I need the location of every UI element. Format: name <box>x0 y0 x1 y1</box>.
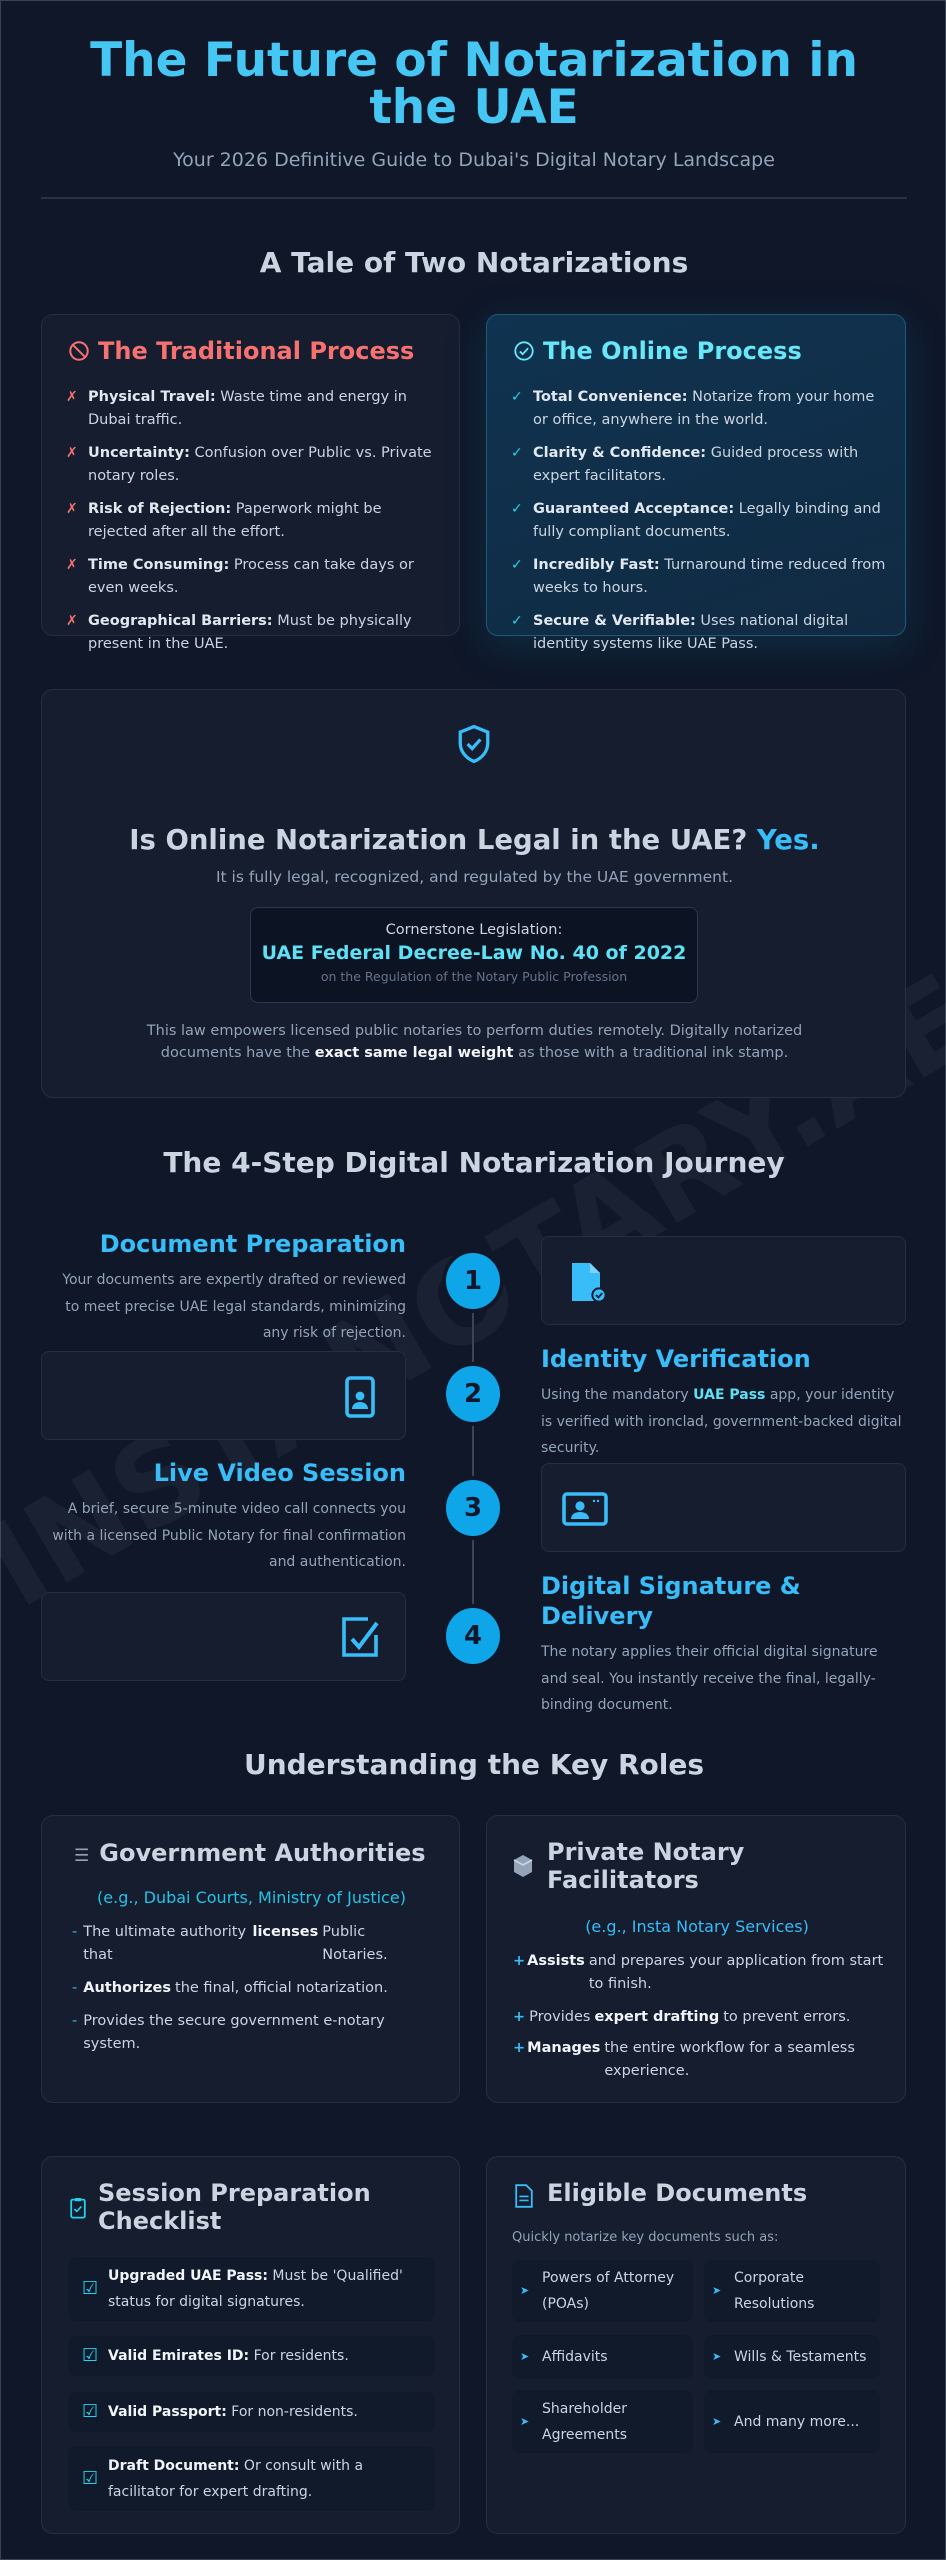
step 3 text <box>52 1459 406 1570</box>
panel: eligible documents: ➤ <box>712 2350 721 2363</box>
list: benefits: ✓ <box>511 501 523 517</box>
heading: traditional: The Traditional Process <box>98 337 414 365</box>
panel: eligible documents: ➤ <box>712 2284 721 2297</box>
list: benefits <box>511 389 885 652</box>
callout: legislation <box>250 907 698 1003</box>
list: benefits: Clarity & Confidence: Guided process with expert facilitators. <box>533 445 858 484</box>
step 4 text: Digital Signature & <box>541 1572 801 1600</box>
list: gov duties: Authorizes <box>83 1980 171 1996</box>
list: drawbacks: Time Consuming: Process can take days or even weeks. <box>88 557 414 596</box>
step 1 text: to meet precise UAE legal standards, minimizing any risk of rejection. <box>65 1298 406 1341</box>
step 4 circle <box>446 1608 500 1664</box>
heading: legal: Is Online Notarization Legal in the UAE? Yes. <box>129 824 820 856</box>
panel: eligible documents: Wills & Testaments <box>734 2349 866 2365</box>
title: The Future of Notarization in <box>90 33 858 88</box>
step 3 icon box <box>541 1463 906 1552</box>
title <box>90 33 858 135</box>
text: gov examples: (e.g., Dubai Courts, Ministry of Justice) <box>97 1888 406 1907</box>
heading: private: Facilitators <box>547 1866 699 1894</box>
list: drawbacks: Uncertainty: Confusion over Public vs. Private notary roles. <box>88 445 432 484</box>
list: private duties <box>513 1953 883 2079</box>
heading: journey: The 4-Step Digital Notarization Journey <box>163 1146 785 1179</box>
panel: eligible documents: ➤ <box>712 2414 721 2428</box>
list: drawbacks: ✗ <box>66 613 78 629</box>
list: private duties: Provides <box>529 2009 590 2025</box>
callout: legislation: Cornerstone Legislation: <box>386 922 562 938</box>
list: private duties: and prepares your application from start to finish. <box>589 1953 883 1992</box>
list: gov duties: licenses <box>252 1924 318 1940</box>
icon: cube <box>514 1855 532 1877</box>
grid: documents <box>512 2260 693 2322</box>
step 3 circle <box>446 1480 500 1536</box>
step 4 text: The notary applies their official digital signature and seal. You instantly receive the final, legally-binding document. <box>541 1644 878 1713</box>
heading: government: ☰ Government Authorities <box>74 1839 426 1867</box>
panel: traditional process <box>41 314 460 636</box>
step 2 text <box>541 1345 901 1456</box>
grid: documents: Powers of Attorney (POAs) <box>542 2270 674 2312</box>
step 1 icon box <box>541 1236 906 1325</box>
list: private duties: Assists <box>527 1953 585 1969</box>
heading: private <box>547 1838 744 1894</box>
list: private duties: + <box>513 2040 525 2056</box>
icon: video <box>562 1492 608 1526</box>
step 1 text <box>62 1230 406 1341</box>
item: uae pass: ☑ <box>82 2278 98 2299</box>
item: emirates id: ☑ <box>82 2345 98 2366</box>
list: benefits: ✓ <box>511 445 523 461</box>
step 3 circle: 3 <box>464 1493 482 1523</box>
list: gov duties: - <box>72 1980 77 1996</box>
item: draft: ☑ <box>82 2468 98 2488</box>
panel: checklist <box>41 2156 460 2534</box>
list: drawbacks: Physical Travel: Waste time and energy in Dubai traffic. <box>88 389 407 428</box>
text: explanation: This law empowers licensed public notaries to perform duties remotely. Digitally notarized documents have the exact same legal weight as those with a traditional ink stamp. <box>147 1023 802 1061</box>
panel: eligible documents: ➤ <box>520 2414 529 2428</box>
step 3 text: Live Video Session <box>154 1459 406 1487</box>
panel: private facilitators <box>486 1815 906 2103</box>
panel: eligible documents: Affidavits <box>542 2349 608 2365</box>
step 2 text: Using the mandatory UAE Pass app, your identity is verified with ironclad, government-backed digital security. <box>541 1387 901 1456</box>
step 4 icon box <box>41 1592 406 1681</box>
step 2 circle <box>446 1366 500 1422</box>
item: emirates id: Valid Emirates ID: For residents. <box>108 2348 349 2364</box>
item: uae pass: Upgraded UAE Pass: Must be 'Qualified' status for digital signatures. <box>108 2268 403 2310</box>
step 1 circle <box>446 1253 500 1309</box>
item: uae pass <box>68 2257 435 2321</box>
timeline line <box>472 1281 474 1636</box>
list: private duties: the entire workflow for a seamless experience. <box>604 2040 855 2079</box>
list: benefits: ✓ <box>511 389 523 405</box>
list: private duties: expert drafting <box>594 2009 719 2025</box>
callout: legislation: on the Regulation of the Notary Public Profession <box>321 969 627 984</box>
icon: shield <box>458 724 490 764</box>
list: drawbacks: rejected after all the effort. <box>88 524 285 540</box>
heading: checklist: Session Preparation <box>98 2179 371 2207</box>
step 1 text: Document Preparation <box>100 1230 406 1258</box>
subtitle: Your 2026 Definitive Guide to Dubai's Digital Notary Landscape <box>173 149 775 171</box>
icon: clipboard <box>70 2198 86 2218</box>
list: private duties: + <box>513 1953 525 1969</box>
step 1 circle: 1 <box>464 1266 482 1296</box>
list: benefits: Secure & Verifiable: Uses national digital identity systems like UAE Pass. <box>533 613 848 652</box>
heading: private: Private Notary <box>547 1838 744 1866</box>
panel: eligible documents: ➤ <box>520 2350 529 2363</box>
item: draft: Draft Document: Or consult with a facilitator for expert drafting. <box>108 2458 363 2500</box>
text: private examples: (e.g., Insta Notary Services) <box>585 1917 809 1936</box>
list: gov duties: - <box>72 2013 77 2029</box>
panel: online process <box>486 314 906 636</box>
panel: legality <box>41 689 906 1098</box>
heading: tale of two: A Tale of Two Notarizations <box>260 246 688 279</box>
list: drawbacks: Risk of Rejection: Paperwork might be <box>88 501 382 517</box>
step 2 circle: 2 <box>464 1379 482 1409</box>
panel: eligible documents: And many more... <box>734 2414 859 2430</box>
item: passport <box>68 2392 435 2432</box>
item: draft <box>68 2446 435 2511</box>
icon: id badge <box>345 1376 375 1418</box>
icon: signed doc <box>342 1617 378 1657</box>
panel: eligible documents: Shareholder Agreements <box>542 2400 627 2442</box>
list: drawbacks: ✗ <box>66 557 78 573</box>
list: gov duties: the final, official notarization. <box>175 1980 388 1996</box>
list: private duties: + <box>513 2009 525 2025</box>
grid: documents: ➤ <box>520 2284 529 2297</box>
text: intro: Quickly notarize key documents such as: <box>512 2230 778 2245</box>
icon: document <box>572 1263 605 1301</box>
list: gov duties: The ultimate authority that <box>83 1924 246 1963</box>
step 4 text: Delivery <box>541 1602 653 1630</box>
list: benefits: Guaranteed Acceptance: Legally binding and fully compliant documents. <box>533 501 881 540</box>
title: the UAE <box>369 80 579 135</box>
list: drawbacks: ✗ <box>66 501 78 517</box>
heading: roles: Understanding the Key Roles <box>244 1748 704 1781</box>
step 2 text: Identity Verification <box>541 1345 811 1373</box>
list: gov duties: Provides the secure government e-notary system. <box>83 2013 385 2052</box>
panel: eligible documents: Corporate Resolutions <box>734 2270 814 2312</box>
step 3 text: A brief, secure 5-minute video call connects you with a licensed Public Notary for final confirmation and authentication. <box>52 1501 406 1570</box>
item: emirates id <box>68 2336 435 2376</box>
list: private duties: to prevent errors. <box>723 2009 850 2025</box>
list: benefits: ✓ <box>511 557 523 573</box>
panel: eligible documents <box>486 2156 906 2534</box>
heading: eligible: Eligible Documents <box>547 2179 807 2207</box>
list: drawbacks <box>66 389 432 652</box>
list: drawbacks: ✗ <box>66 389 78 405</box>
step 4 text <box>540 1572 878 1713</box>
item: passport: ☑ <box>82 2401 98 2422</box>
list: drawbacks: Geographical Barriers: Must be physically present in the UAE. <box>88 613 412 652</box>
step 1 text: Your documents are expertly drafted or reviewed <box>62 1272 406 1288</box>
list: benefits: ✓ <box>511 613 523 629</box>
callout: legislation: UAE Federal Decree-Law No. 40 of 2022 <box>262 942 686 964</box>
list: gov duties: Public Notaries. <box>322 1924 388 1963</box>
step 2 icon box <box>41 1351 406 1440</box>
panel: government <box>41 1815 460 2103</box>
list: benefits: Incredibly Fast: Turnaround time reduced from weeks to hours. <box>533 557 885 596</box>
heading: checklist: Checklist <box>98 2207 221 2235</box>
list: gov duties <box>72 1924 388 2052</box>
heading: online: The Online Process <box>543 337 802 365</box>
list: private duties: Manages <box>527 2040 600 2056</box>
list: drawbacks: ✗ <box>66 445 78 461</box>
text: subline: It is fully legal, recognized, and regulated by the UAE government. <box>216 868 733 886</box>
icon: document <box>515 2184 533 2208</box>
item: passport: Valid Passport: For non-residents. <box>108 2404 358 2420</box>
step 4 circle: 4 <box>464 1621 482 1651</box>
list: gov duties: - <box>72 1924 77 1940</box>
list: benefits: Total Convenience: Notarize from your home or office, anywhere in the world. <box>533 389 874 428</box>
heading: checklist <box>98 2179 371 2235</box>
